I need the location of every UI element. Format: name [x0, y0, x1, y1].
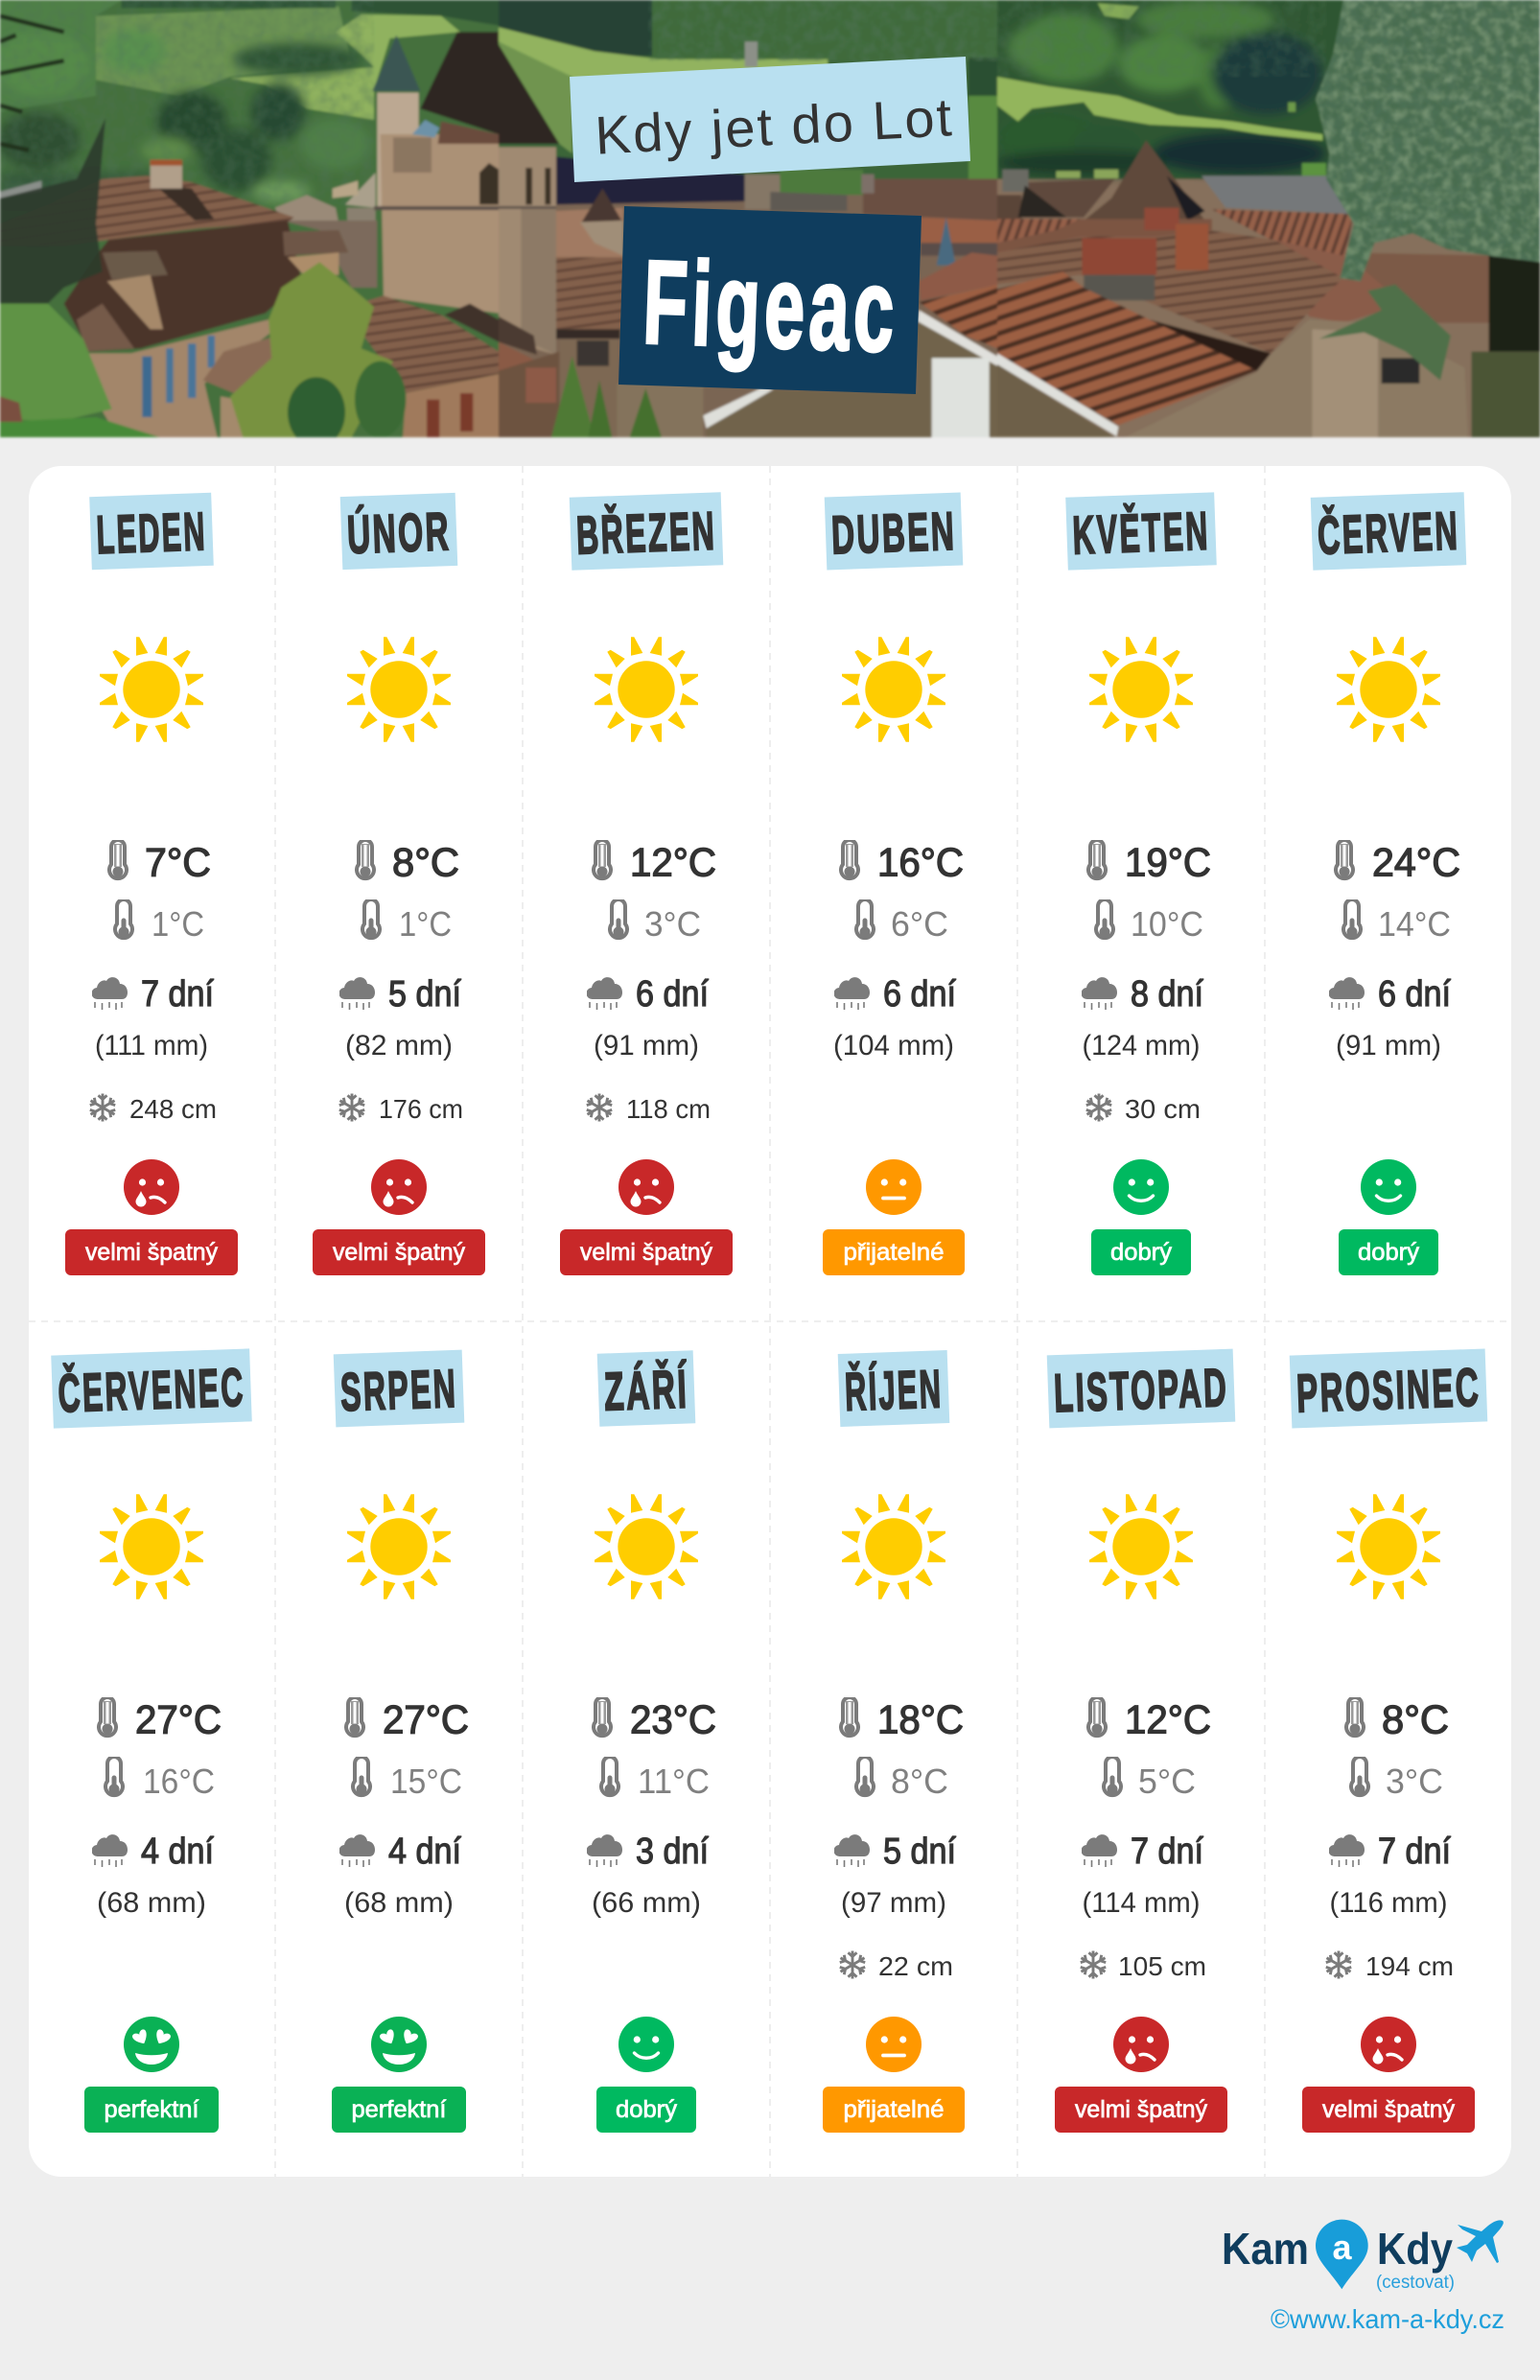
high temperature: 16°C [877, 840, 964, 884]
rainy days [1328, 974, 1451, 1015]
month label: ÚNOR [346, 501, 452, 565]
icon: smiling face [1361, 1159, 1416, 1215]
month column: LEDEN [65, 493, 238, 1275]
rainy days: 5 dní [883, 1832, 956, 1872]
low temperature [105, 1757, 215, 1801]
snowfall: 176 cm [379, 1094, 463, 1124]
rating badge: velmi špatný [1322, 2096, 1455, 2123]
icon: airplane [1457, 2220, 1504, 2263]
icon: love-eyes face [124, 2017, 179, 2072]
low temperature [601, 1757, 710, 1801]
rainy days: 7 dní [1131, 1832, 1203, 1872]
low temperature: 15°C [390, 1762, 462, 1801]
rainfall: (91 mm) [594, 1030, 699, 1062]
rating badge [1091, 1229, 1191, 1275]
rating badge: přijatelné [844, 1239, 944, 1266]
low temperature: 1°C [152, 904, 204, 944]
rainy days: 7 dní [1378, 1832, 1451, 1872]
high temperature [357, 840, 459, 884]
low temperature [856, 1757, 948, 1801]
snowfall: 105 cm [1118, 1951, 1206, 1981]
snowfall [338, 1094, 463, 1124]
month column: PROSINEC [1290, 1348, 1487, 2133]
month label [1311, 492, 1466, 571]
rainy days: 7 dní [141, 974, 214, 1015]
month label [838, 1350, 949, 1427]
high temperature: 27°C [135, 1697, 222, 1741]
rating badge: velmi špatný [1075, 2096, 1207, 2123]
rainfall: (124 mm) [1082, 1030, 1201, 1062]
icon: sun [1089, 1494, 1193, 1599]
low temperature: 5°C [1138, 1762, 1196, 1801]
rainy days: 5 dní [388, 974, 461, 1015]
month column: ZÁŘÍ [586, 1350, 716, 2133]
rainy days [586, 974, 709, 1015]
title banner: Kdy jet do Lot [570, 57, 970, 182]
title banner: Kdy jet do Lot: Kdy jet do Lot [594, 86, 953, 166]
rating badge [1302, 2087, 1475, 2133]
month column: KVĚTEN [1065, 492, 1217, 1275]
low temperature [856, 899, 948, 944]
snowfall [1324, 1951, 1454, 1981]
low temperature [1343, 899, 1451, 944]
icon: sun [1089, 637, 1193, 742]
low temperature: 14°C [1378, 904, 1451, 944]
icon: sun [347, 1494, 451, 1599]
month label [1047, 1349, 1235, 1428]
rating badge: dobrý [616, 2096, 678, 2123]
low temperature: 16°C [143, 1762, 215, 1801]
high temperature [1346, 1697, 1449, 1741]
month label: LEDEN [95, 501, 208, 565]
month column: ČERVENEC [51, 1348, 252, 2133]
title banner: Figeac: Figeac [641, 236, 900, 378]
rainfall: (116 mm) [1329, 1887, 1448, 1919]
rainy days [833, 1832, 956, 1872]
high temperature: 19°C [1125, 840, 1211, 884]
high temperature [346, 1697, 469, 1741]
rating badge [313, 1229, 485, 1275]
month label: ŘÍJEN [844, 1358, 944, 1422]
month label [597, 1350, 695, 1427]
month column: SRPEN [332, 1350, 469, 2133]
title banner: Figeac [618, 206, 922, 394]
month label: DUBEN [830, 501, 957, 565]
low temperature [1096, 899, 1203, 944]
high temperature [1088, 840, 1211, 884]
high temperature [841, 840, 964, 884]
logo: Kam a Kdy (cestovat) [1222, 2220, 1504, 2293]
rating badge [65, 1229, 238, 1275]
month label [340, 493, 457, 570]
rainfall: (104 mm) [833, 1030, 954, 1062]
rating badge [1339, 1229, 1438, 1275]
high temperature [99, 1697, 222, 1741]
rainy days: 3 dní [636, 1832, 709, 1872]
month column: ÚNOR [313, 493, 485, 1275]
low temperature [1351, 1757, 1443, 1801]
high temperature [1088, 1697, 1211, 1741]
month label: BŘEZEN [575, 500, 717, 566]
high temperature [594, 1697, 716, 1741]
high temperature: 8°C [1382, 1697, 1449, 1741]
rainfall: (91 mm) [1336, 1030, 1441, 1062]
icon: sun [595, 1494, 698, 1599]
high temperature [841, 1697, 964, 1741]
month column: ČERVEN [1311, 492, 1466, 1275]
rainfall: (82 mm) [345, 1030, 453, 1062]
snowfall [88, 1094, 217, 1124]
high temperature [594, 840, 716, 884]
high temperature: 27°C [383, 1697, 469, 1741]
rating badge [823, 1229, 965, 1275]
icon: sun [842, 1494, 945, 1599]
month column: LISTOPAD [1047, 1349, 1235, 2133]
rating badge [1055, 2087, 1227, 2133]
rainy days [91, 1832, 214, 1872]
icon: sad face [618, 1159, 674, 1215]
rainy days: 6 dní [883, 974, 956, 1015]
high temperature: 23°C [630, 1697, 716, 1741]
snowfall [838, 1951, 953, 1981]
low temperature: 1°C [399, 904, 452, 944]
rainy days [586, 1832, 709, 1872]
month label [1065, 492, 1217, 571]
low temperature: 11°C [638, 1762, 710, 1801]
rating badge [560, 1229, 733, 1275]
rating badge [596, 2087, 696, 2133]
rating badge [84, 2087, 219, 2133]
rainy days [1081, 1832, 1203, 1872]
high temperature: 24°C [1372, 840, 1460, 884]
rating badge: dobrý [1110, 1239, 1173, 1266]
logo subtitle: (cestovat) [1376, 2273, 1455, 2293]
rating badge: dobrý [1358, 1239, 1420, 1266]
high temperature [1336, 840, 1460, 884]
high temperature: 8°C [392, 840, 459, 884]
icon: sun [842, 637, 945, 742]
month label: KVĚTEN [1071, 501, 1211, 565]
rainy days [91, 974, 214, 1015]
rainy days [1328, 1832, 1451, 1872]
rating badge: velmi špatný [580, 1239, 712, 1266]
low temperature: 6°C [891, 904, 948, 944]
panel: monthly climate table [29, 466, 1511, 2177]
logo text: Kam: Kam [1222, 2224, 1309, 2274]
rainfall: (66 mm) [592, 1887, 701, 1919]
icon: smiling face [1113, 1159, 1169, 1215]
rainy days: 4 dní [388, 1832, 461, 1872]
low temperature [610, 899, 701, 944]
low temperature [362, 899, 452, 944]
icon: sad face [1113, 2017, 1169, 2072]
snowfall: 194 cm [1365, 1951, 1454, 1981]
rating badge: velmi špatný [85, 1239, 218, 1266]
snowfall: 118 cm [626, 1094, 711, 1124]
icon: love-eyes face [371, 2017, 427, 2072]
rainy days [338, 1832, 461, 1872]
icon: sad face [371, 1159, 427, 1215]
icon: sad face [1361, 2017, 1416, 2072]
month label: ZÁŘÍ [603, 1358, 689, 1422]
rainfall: (68 mm) [344, 1887, 454, 1919]
rainy days: 6 dní [636, 974, 709, 1015]
website credit: ©www.kam-a-kdy.cz [1271, 2304, 1505, 2334]
month column: BŘEZEN [560, 492, 733, 1275]
icon: smiling face [618, 2017, 674, 2072]
high temperature: 7°C [145, 840, 211, 884]
rainy days [338, 974, 461, 1015]
low temperature [115, 899, 204, 944]
icon: sun [1337, 1494, 1440, 1599]
high temperature [109, 840, 211, 884]
low temperature [1104, 1757, 1196, 1801]
snowfall: 22 cm [878, 1951, 953, 1981]
rainfall: (68 mm) [97, 1887, 206, 1919]
rainy days: 6 dní [1378, 974, 1451, 1015]
rainfall: (111 mm) [95, 1030, 208, 1062]
icon: sun [347, 637, 451, 742]
rating badge: perfektní [351, 2096, 447, 2123]
rainfall: (114 mm) [1082, 1887, 1201, 1919]
icon: neutral face [866, 1159, 922, 1215]
rainy days: 8 dní [1131, 974, 1203, 1015]
month label: SRPEN [339, 1358, 458, 1422]
high temperature: 12°C [1125, 1697, 1211, 1741]
snowfall: 248 cm [129, 1094, 217, 1124]
month column: ŘÍJEN [823, 1350, 965, 2133]
rating badge [332, 2087, 466, 2133]
icon: location pin: a [1332, 2228, 1352, 2267]
month label [825, 493, 963, 570]
rating badge: perfektní [104, 2096, 199, 2123]
icon: sun [100, 637, 203, 742]
low temperature [353, 1757, 462, 1801]
high temperature: 18°C [877, 1697, 964, 1741]
snowfall [1085, 1094, 1201, 1124]
snowfall [1079, 1951, 1206, 1981]
rating badge [823, 2087, 965, 2133]
icon: sun [100, 1494, 203, 1599]
icon: location pin [1316, 2220, 1368, 2289]
rainy days: 4 dní [141, 1832, 214, 1872]
month label: ČERVENEC [58, 1357, 246, 1423]
month label [51, 1348, 252, 1429]
rainy days [1081, 974, 1203, 1015]
rainfall: (97 mm) [841, 1887, 946, 1919]
icon: sun [595, 637, 698, 742]
snowfall: 30 cm [1125, 1094, 1201, 1124]
icon: neutral face [866, 2017, 922, 2072]
low temperature: 8°C [891, 1762, 948, 1801]
snowfall [585, 1094, 711, 1124]
header photo: Figeac rooftops [0, 0, 1540, 448]
rainy days [833, 974, 956, 1015]
month label: LISTOPAD [1053, 1357, 1229, 1423]
low temperature: 3°C [644, 904, 701, 944]
rating badge: přijatelné [844, 2096, 944, 2123]
month label [334, 1350, 464, 1427]
icon: sun [1337, 637, 1440, 742]
month column: DUBEN [823, 493, 965, 1275]
month label [89, 493, 214, 570]
low temperature: 3°C [1386, 1762, 1443, 1801]
month label [570, 492, 723, 571]
high temperature: 12°C [630, 840, 716, 884]
low temperature: 10°C [1131, 904, 1203, 944]
logo text: Kdy: Kdy [1377, 2224, 1453, 2274]
rating badge: velmi špatný [333, 1239, 465, 1266]
icon: sad face [124, 1159, 179, 1215]
